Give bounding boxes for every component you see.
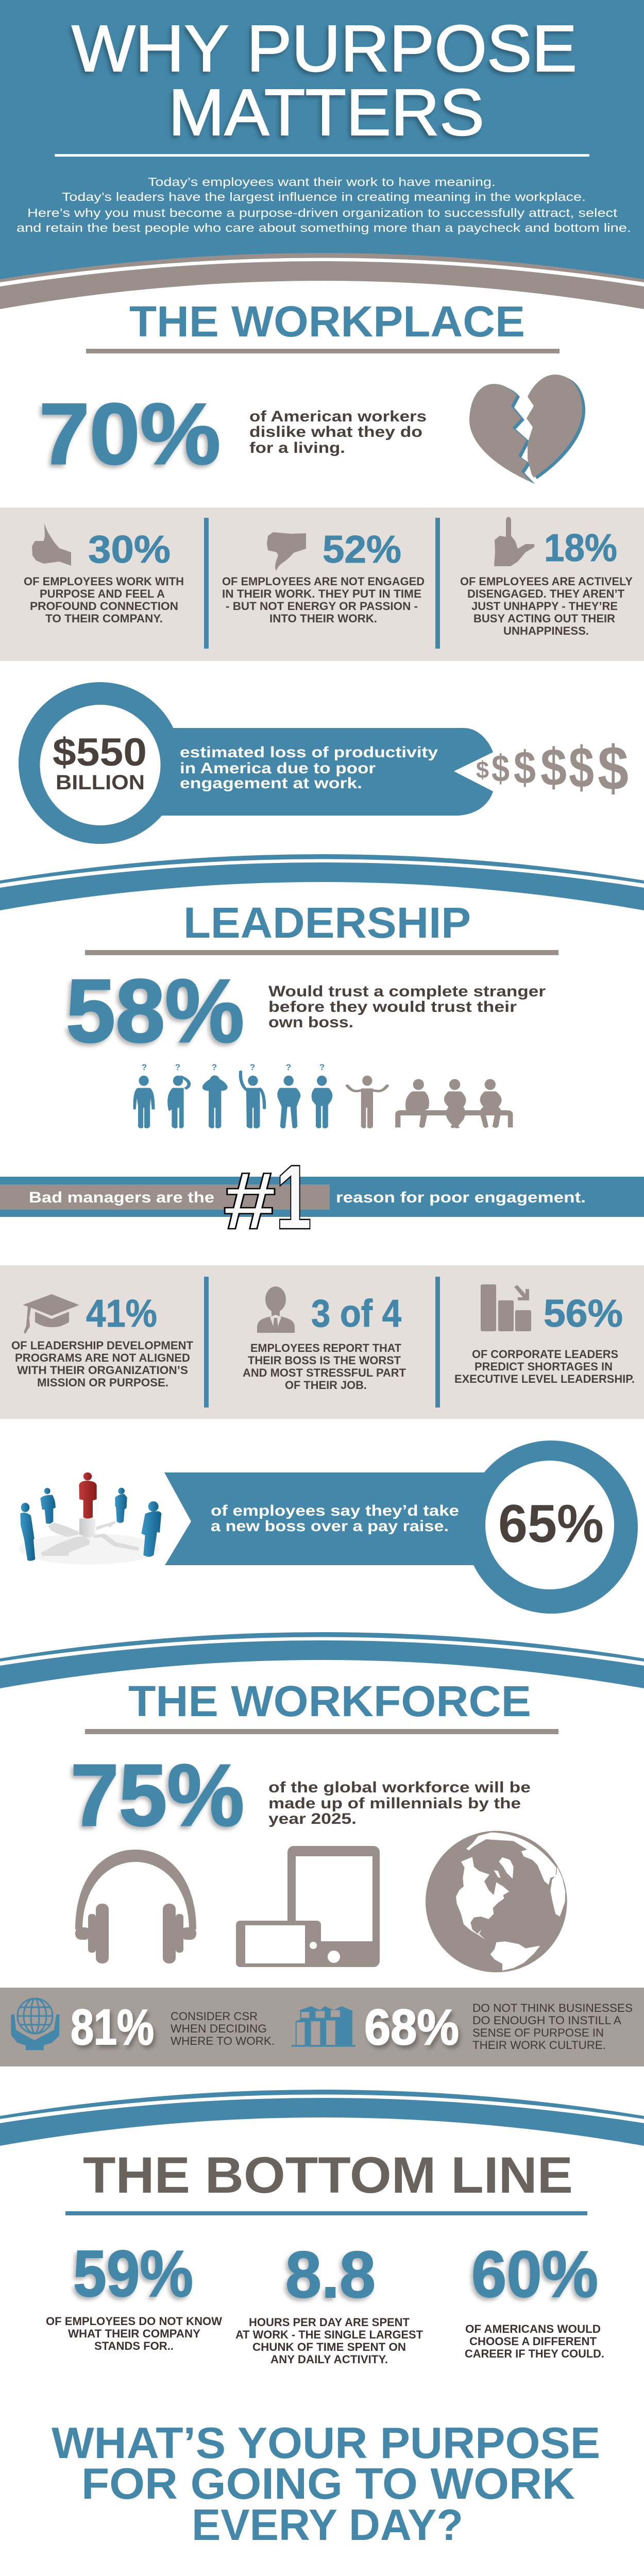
text: number one: 1 bbox=[276, 1146, 312, 1248]
stat column: 8.8 hours: 8.8 bbox=[285, 2238, 376, 2311]
icon: dollar signs: $ bbox=[540, 738, 567, 797]
intro paragraph: and retain the best people who care about something more than a paycheck and bottom line. bbox=[16, 221, 631, 234]
text: shortages bbox=[454, 1348, 635, 1385]
text: actively disengaged: DISENGAGED. THEY AREN’T bbox=[467, 587, 624, 600]
icon: dollar signs: $ bbox=[514, 742, 536, 794]
text: boss is worst: THEIR BOSS IS THE WORST bbox=[248, 1354, 401, 1367]
icon: dollar signs: $ bbox=[476, 756, 489, 783]
text: work with purpose: PROFOUND CONNECTION bbox=[30, 600, 178, 613]
text: productivity loss: in America due to poor bbox=[180, 760, 376, 777]
icon: thumbs down bbox=[267, 532, 306, 571]
text: actively disengaged: OF EMPLOYEES ARE ACTIVELY bbox=[460, 575, 633, 588]
text: different career bbox=[465, 2323, 604, 2360]
text: trust a stranger bbox=[268, 983, 546, 1031]
section heading: the workplace: THE WORKPLACE bbox=[129, 297, 525, 346]
icon: globe in hands bbox=[11, 1998, 59, 2050]
text: hours per day: ANY DAILY ACTIVITY. bbox=[270, 2353, 388, 2366]
stat: 550 billion bbox=[53, 731, 147, 794]
text: company stands for: WHAT THEIR COMPANY bbox=[68, 2327, 200, 2340]
intro paragraph bbox=[16, 175, 631, 234]
text: development programs: WITH THEIR ORGANIZATION’S bbox=[17, 1364, 188, 1377]
text: different career: CHOOSE A DIFFERENT bbox=[469, 2335, 597, 2348]
question marks: ? bbox=[286, 1062, 291, 1072]
text: new boss bbox=[211, 1502, 459, 1535]
text: not engaged: INTO THEIR WORK. bbox=[269, 612, 377, 625]
icon: buildings bbox=[292, 2006, 355, 2047]
text: sense of purpose: THEIR WORK CULTURE. bbox=[472, 2039, 606, 2052]
text: sense of purpose bbox=[472, 2002, 633, 2052]
people figures bbox=[133, 1072, 513, 1128]
stat column: 60 percent bbox=[465, 2238, 604, 2360]
intro paragraph: Here’s why you must become a purpose-driven organization to successfully attract, select bbox=[27, 206, 618, 219]
banner: bad managers bbox=[0, 1146, 644, 1248]
text: not engaged: OF EMPLOYEES ARE NOT ENGAGED bbox=[222, 575, 425, 588]
stat column: 59 percent: 59% bbox=[73, 2237, 193, 2310]
text: american workers: dislike what they do bbox=[249, 423, 422, 440]
text: development programs: MISSION OR PURPOSE. bbox=[37, 1376, 168, 1389]
icon: dollar signs: $ bbox=[569, 735, 594, 800]
icon: dollar signs bbox=[476, 733, 629, 803]
text: number one: # bbox=[223, 1156, 276, 1246]
callout: 550 billion bbox=[19, 682, 629, 844]
text: hours per day: HOURS PER DAY ARE SPENT bbox=[249, 2316, 410, 2329]
stat: 70 percent: 70% bbox=[39, 385, 221, 482]
stat: 550 billion: BILLION bbox=[56, 771, 145, 794]
text: boss is worst: EMPLOYEES REPORT THAT bbox=[250, 1342, 401, 1354]
section heading: the workforce bbox=[85, 1677, 558, 1734]
text: millennials: year 2025. bbox=[268, 1810, 357, 1827]
text: boss is worst: AND MOST STRESSFUL PART bbox=[243, 1366, 406, 1379]
icon: headphones bbox=[75, 1850, 196, 1963]
text: consider csr bbox=[171, 2010, 275, 2047]
section heading: the workforce: THE WORKFORCE bbox=[128, 1677, 531, 1725]
text: american workers: of American workers bbox=[249, 408, 427, 425]
icon: phone and tablet bbox=[236, 1846, 380, 1967]
text: sense of purpose: DO ENOUGH TO INSTILL A bbox=[472, 2014, 621, 2027]
section heading: the workplace bbox=[86, 297, 560, 353]
intro paragraph: Today’s employees want their work to have meaning. bbox=[148, 175, 496, 189]
stat: 550 billion: $550 bbox=[53, 731, 147, 774]
text: actively disengaged: UNHAPPINESS. bbox=[503, 624, 589, 637]
question marks: ? bbox=[142, 1062, 147, 1072]
icon: declining bars bbox=[481, 1284, 531, 1331]
panel: workplace stats bbox=[0, 507, 644, 661]
stat: 68 percent: 68% bbox=[364, 1999, 459, 2055]
arc divider: workplace bbox=[0, 253, 644, 309]
text: number one bbox=[223, 1146, 312, 1248]
title: MATTERS bbox=[168, 76, 484, 149]
icon: broken heart bbox=[469, 375, 585, 484]
stat: 81 percent: 81% bbox=[71, 1999, 154, 2055]
text: company stands for bbox=[46, 2315, 223, 2352]
text: shortages: EXECUTIVE LEVEL LEADERSHIP. bbox=[454, 1372, 635, 1385]
text: shortages: OF CORPORATE LEADERS bbox=[472, 1348, 618, 1361]
text: work with purpose: OF EMPLOYEES WORK WITH bbox=[24, 575, 184, 588]
text: not engaged bbox=[222, 575, 425, 625]
text: american workers: for a living. bbox=[249, 439, 345, 456]
stat: 56 percent: 56% bbox=[544, 1292, 623, 1335]
icon row: people bbox=[133, 1062, 513, 1128]
text: work with purpose bbox=[24, 575, 184, 625]
question marks: ? bbox=[250, 1062, 255, 1072]
text: productivity loss bbox=[180, 744, 438, 792]
closing question: FOR GOING TO WORK bbox=[81, 2460, 575, 2509]
text: hours per day: CHUNK OF TIME SPENT ON bbox=[252, 2341, 406, 2353]
band: csr stats bbox=[0, 1988, 644, 2066]
text: development programs: OF LEADERSHIP DEVELOPMENT bbox=[11, 1339, 193, 1352]
stat: 52 percent: 52% bbox=[323, 528, 401, 571]
question marks: ? bbox=[319, 1062, 325, 1072]
text: development programs: PROGRAMS ARE NOT ALIGNED bbox=[15, 1351, 190, 1364]
intro paragraph: Today’s leaders have the largest influence in creating meaning in the workplace. bbox=[62, 190, 586, 204]
stat: 75 percent: 75% bbox=[71, 1747, 244, 1844]
text: sense of purpose: DO NOT THINK BUSINESSES bbox=[472, 2002, 633, 2014]
stat: 65 percent: 65% bbox=[498, 1494, 604, 1554]
icon: boss person bbox=[257, 1286, 295, 1333]
panel: leadership stats bbox=[0, 1265, 644, 1419]
stat column: 60 percent: 60% bbox=[471, 2238, 598, 2311]
text: development programs bbox=[11, 1339, 193, 1389]
title bbox=[72, 12, 577, 149]
icon: graduation cap bbox=[23, 1294, 79, 1334]
text: company stands for: OF EMPLOYEES DO NOT KNOW bbox=[46, 2315, 223, 2328]
closing question: WHAT’S YOUR PURPOSE bbox=[52, 2419, 600, 2468]
section heading: leadership: LEADERSHIP bbox=[183, 899, 471, 947]
section heading: the bottom line: THE BOTTOM LINE bbox=[83, 2146, 573, 2204]
stat: 41 percent: 41% bbox=[86, 1292, 157, 1335]
text: american workers bbox=[249, 408, 427, 456]
title: WHY PURPOSE bbox=[72, 12, 577, 86]
stat: 58 percent: 58% bbox=[66, 960, 244, 1061]
section heading: leadership bbox=[85, 899, 558, 955]
text: millennials bbox=[268, 1779, 531, 1827]
text: consider csr: CONSIDER CSR bbox=[171, 2010, 258, 2023]
text: actively disengaged bbox=[460, 575, 633, 637]
text: millennials: of the global workforce will be bbox=[268, 1779, 531, 1796]
text: hours per day: AT WORK - THE SINGLE LARGEST bbox=[235, 2328, 423, 2341]
text: company stands for: STANDS FOR.. bbox=[94, 2340, 174, 2352]
icon: globe bbox=[426, 1831, 567, 1972]
icon: pointing hand bbox=[494, 517, 535, 566]
arc divider: bottom line bbox=[0, 2090, 644, 2146]
stat: 30 percent: 30% bbox=[88, 528, 171, 571]
text: new boss: a new boss over a pay raise. bbox=[211, 1518, 449, 1535]
text: not engaged: IN THEIR WORK. THEY PUT IN TIME bbox=[222, 587, 421, 600]
header panel bbox=[0, 0, 644, 289]
text: different career: OF AMERICANS WOULD bbox=[465, 2323, 601, 2335]
text: consider csr: WHEN DECIDING bbox=[171, 2022, 267, 2035]
text: millennials: made up of millennials by the bbox=[268, 1795, 521, 1812]
arc divider: leadership bbox=[0, 854, 644, 910]
text: not engaged: - BUT NOT ENERGY OR PASSION - bbox=[226, 600, 418, 613]
banner: new boss bbox=[164, 1440, 638, 1614]
text: boss is worst: OF THEIR JOB. bbox=[285, 1379, 367, 1392]
question marks bbox=[142, 1062, 325, 1072]
text: work with purpose: PURPOSE AND FEEL A bbox=[40, 587, 165, 600]
text: trust a stranger: own boss. bbox=[268, 1014, 353, 1031]
text: poor engagement: reason for poor engagement. bbox=[336, 1189, 586, 1206]
text: new boss: of employees say they’d take bbox=[211, 1502, 459, 1519]
illustration: leader among people bbox=[19, 1472, 161, 1565]
text: productivity loss: engagement at work. bbox=[180, 775, 362, 792]
text: different career: CAREER IF THEY COULD. bbox=[465, 2347, 604, 2360]
icon: dollar signs: $ bbox=[492, 747, 510, 790]
stat: 18 percent: 18% bbox=[544, 526, 617, 569]
text: bad managers: Bad managers are the bbox=[29, 1189, 214, 1206]
text: work with purpose: TO THEIR COMPANY. bbox=[45, 612, 163, 625]
closing question: EVERY DAY? bbox=[192, 2501, 463, 2550]
arc divider: workforce bbox=[0, 1632, 644, 1688]
text: productivity loss: estimated loss of productivity bbox=[180, 744, 438, 761]
text: hours per day bbox=[235, 2316, 423, 2366]
stat: 3 of 4: 3 of 4 bbox=[311, 1292, 401, 1335]
text: shortages: PREDICT SHORTAGES IN bbox=[474, 1360, 613, 1373]
text: boss is worst bbox=[243, 1342, 406, 1392]
text: actively disengaged: BUSY ACTING OUT THEIR bbox=[473, 612, 615, 625]
question marks: ? bbox=[175, 1062, 180, 1072]
icon: thumbs up bbox=[32, 523, 71, 566]
stat column: 8.8 hours bbox=[235, 2238, 423, 2366]
text: actively disengaged: JUST UNHAPPY - THEY’RE bbox=[471, 600, 618, 613]
text: sense of purpose: SENSE OF PURPOSE IN bbox=[472, 2026, 604, 2039]
text: trust a stranger: Would trust a complete stranger bbox=[268, 983, 546, 1000]
question marks: ? bbox=[212, 1062, 217, 1072]
closing question bbox=[52, 2419, 600, 2550]
icon: dollar signs: $ bbox=[598, 733, 629, 803]
stat column: 59 percent bbox=[46, 2237, 223, 2352]
text: trust a stranger: before they would trust their bbox=[268, 998, 517, 1015]
text: consider csr: WHERE TO WORK. bbox=[171, 2035, 275, 2047]
